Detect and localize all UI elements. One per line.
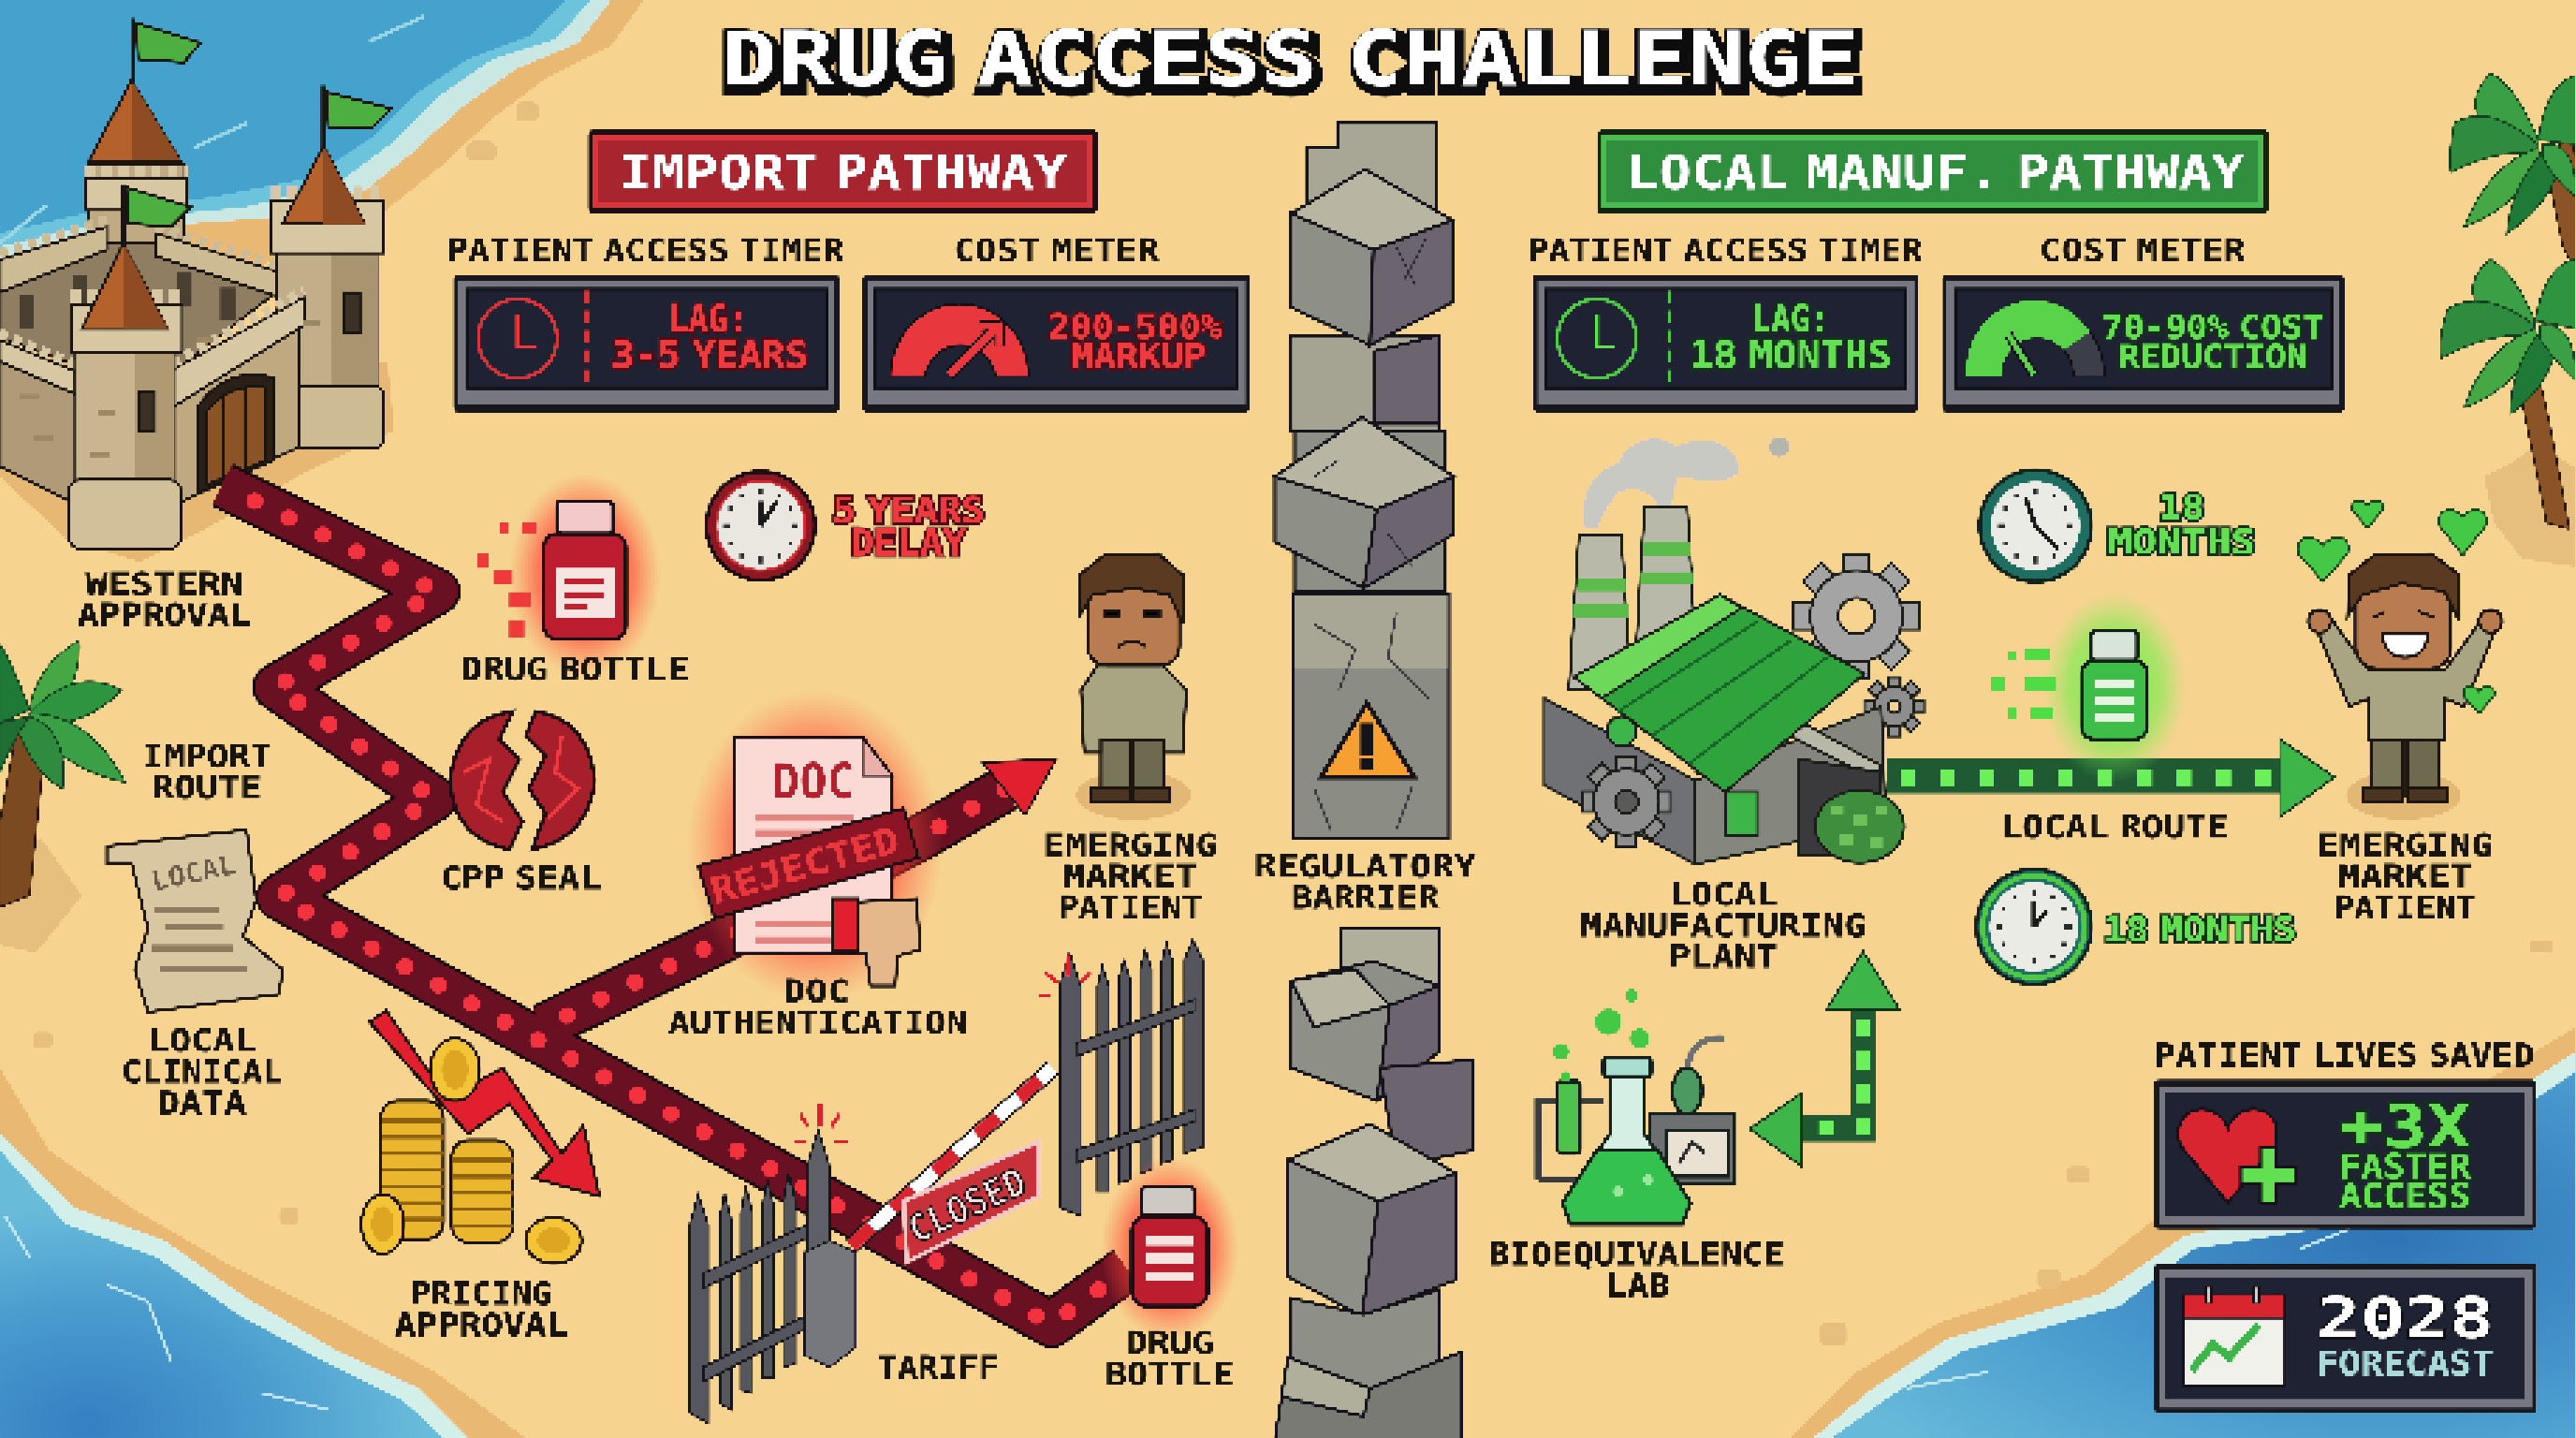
icon: green clock lower <box>1976 869 2091 984</box>
bubbles <box>1553 990 1653 1196</box>
panel: local patient timer <box>1533 274 1919 413</box>
icon: red drug bottle <box>476 473 661 677</box>
windows <box>1725 792 1758 835</box>
panel: patient lives saved: +3X <box>2339 1092 2471 1161</box>
regulatory barrier wall <box>1275 124 1473 1438</box>
right front wall <box>172 320 299 506</box>
banner: local manuf pathway: LOCAL MANUF. PATHWAY <box>1627 146 2245 201</box>
icon: green clock top <box>1980 470 2091 581</box>
label: emerging market patient (import): PATIENT <box>1058 889 1203 927</box>
label: western approval: WESTERN <box>85 565 243 603</box>
flask <box>1562 1077 1690 1225</box>
labels: local meters <box>1528 232 2246 270</box>
banner: import pathway <box>588 130 1097 213</box>
pricing approval coins and arrow <box>361 1010 600 1264</box>
castle: western approval <box>0 18 394 562</box>
palm tree: right top <box>2450 74 2576 271</box>
panel: local cost meter <box>1942 274 2345 413</box>
document rejected <box>687 690 943 1003</box>
label: patient lives saved: PATIENT LIVES SAVED <box>2155 1037 2534 1075</box>
banner: import pathway: IMPORT PATHWAY <box>619 146 1067 201</box>
label: bioequivalence lab <box>1488 1236 1784 1305</box>
happy patient <box>2308 553 2502 820</box>
label: drug bottle lower <box>1105 1325 1234 1394</box>
label: pricing approval: PRICING <box>411 1276 552 1313</box>
panel: 2028 forecast: 2028 <box>2317 1287 2494 1352</box>
roof <box>1573 594 1865 792</box>
red import route <box>222 485 1127 1325</box>
back walls <box>0 220 276 296</box>
label: doc authentication: DOC <box>783 974 849 1011</box>
text: 18 months top: MONTHS <box>2108 521 2256 562</box>
right tower <box>271 85 391 448</box>
label: pricing approval <box>394 1276 568 1344</box>
alarm sparks <box>794 956 1090 1142</box>
label: local manufacturing plant: MANUFACTURING <box>1580 907 1866 945</box>
green local route arrow <box>1888 740 2334 816</box>
stone flecks <box>20 320 320 457</box>
left gate <box>690 1173 809 1423</box>
label: bioequivalence lab: LAB <box>1606 1268 1670 1305</box>
sign: closed: CLOSED <box>901 1160 1033 1253</box>
label: local clinical data: CLINICAL <box>122 1054 283 1092</box>
green L-shaped arrow <box>1749 951 1899 1167</box>
left front wall <box>0 359 79 506</box>
barrier pole <box>851 1068 1053 1245</box>
label: local clinical data: LOCAL <box>148 1022 256 1060</box>
label: local clinical data <box>122 1022 283 1123</box>
text: 18 months top <box>2108 488 2256 562</box>
label: emerging market patient (local): PATIENT <box>2334 889 2477 927</box>
stamp: rejected: REJECTED <box>706 819 904 913</box>
label: doc authentication: AUTHENTICATION <box>668 1005 968 1042</box>
label: local manufacturing plant: PLANT <box>1669 939 1778 976</box>
panel: local cost meter: 70-90% COST <box>2102 309 2324 347</box>
panel: local patient timer: 18 MONTHS <box>1690 333 1892 377</box>
label: emerging market patient (import): EMERGING <box>1043 827 1218 864</box>
panel: patient lives saved: FASTER <box>2339 1146 2472 1186</box>
palm tree: left <box>0 640 124 907</box>
label: emerging market patient (import) <box>1043 827 1218 927</box>
barrier slab <box>1293 594 1449 838</box>
label: regulatory barrier <box>1254 848 1476 917</box>
label: import route: IMPORT <box>142 739 271 776</box>
green gear emblem <box>1606 716 1636 746</box>
labels: local meters: COST METER <box>2040 232 2246 270</box>
icon: calendar chart <box>2184 1286 2285 1387</box>
label: regulatory barrier: REGULATORY <box>1254 848 1476 886</box>
label: local route: LOCAL ROUTE <box>2000 809 2229 846</box>
icon: heart plus <box>2178 1109 2297 1203</box>
wall windows <box>20 271 235 329</box>
labels: import meters: COST METER <box>954 232 1160 270</box>
label: regulatory barrier: BARRIER <box>1292 880 1440 917</box>
label: drug bottle: DRUG BOTTLE <box>461 652 689 689</box>
label: western approval <box>77 565 252 635</box>
icon: red delay clock <box>707 472 815 580</box>
panel: import cost meter: MARKUP <box>1071 336 1206 376</box>
panel: import patient timer: 3-5 YEARS <box>611 333 809 377</box>
coin stacks <box>381 1101 444 1239</box>
castle ground shadow <box>0 353 394 562</box>
label: emerging market patient (local): EMERGING <box>2318 827 2493 864</box>
label: cpp seal: CPP SEAL <box>440 860 601 898</box>
smoke <box>1584 439 1738 529</box>
front gear <box>1582 757 1671 846</box>
lower rocks <box>1275 929 1473 1438</box>
panel: local cost meter: REDUCTION <box>2118 338 2307 376</box>
label: emerging market patient (local) <box>2318 827 2493 927</box>
gate <box>198 374 274 493</box>
label: import route <box>142 739 271 807</box>
panel: 2028 forecast: FORECAST <box>2317 1343 2494 1384</box>
bioequivalence lab <box>1538 990 1734 1225</box>
panel: import cost meter <box>862 274 1251 413</box>
courtyard <box>0 243 276 370</box>
icon: green drug bottle <box>1991 592 2187 782</box>
walls <box>1544 698 1695 864</box>
labels: import meters <box>447 232 1160 270</box>
icon: thumbs down <box>833 899 920 986</box>
right gate <box>1060 940 1203 1216</box>
label: doc authentication <box>668 974 968 1042</box>
icon: local clinical data scroll: LOCAL <box>149 849 239 899</box>
panel: patient lives saved <box>2154 1079 2537 1229</box>
upper rocks <box>1275 124 1454 592</box>
title: DRUG ACCESS CHALLENGE <box>721 16 1859 104</box>
icons: green hearts <box>2298 501 2495 713</box>
label: western approval: APPROVAL <box>77 597 252 635</box>
doorway <box>1799 759 1881 855</box>
panel: patient lives saved: ACCESS <box>2339 1176 2471 1216</box>
icon: broken CPP seal <box>450 712 594 849</box>
label: pricing approval: APPROVAL <box>394 1307 568 1344</box>
panel: import cost meter: 200-500% <box>1048 307 1222 347</box>
label: local clinical data: DATA <box>157 1085 247 1123</box>
front tower <box>69 184 191 549</box>
stamp: rejected <box>698 809 918 918</box>
text: 5 years delay: 5 YEARS <box>832 490 985 532</box>
labels: import meters: PATIENT ACCESS TIMER <box>447 232 844 270</box>
document rejected: DOC <box>772 754 855 811</box>
panel: import patient timer <box>453 274 840 413</box>
palm tree: right lower <box>2440 259 2576 529</box>
gate post <box>805 1131 856 1367</box>
label: import route: ROUTE <box>152 770 262 807</box>
panel: import patient timer: LAG: <box>668 298 748 342</box>
label: emerging market patient (import): MARKET <box>1063 858 1197 896</box>
small gear <box>1865 677 1924 736</box>
machine <box>1649 1114 1734 1183</box>
label: emerging market patient (local): MARKET <box>2338 858 2472 896</box>
chimneys <box>1569 506 1697 690</box>
water: top-left sea <box>0 0 644 312</box>
local manufacturing plant <box>1544 437 1924 864</box>
label: bioequivalence lab: BIOEQUIVALENCE <box>1488 1236 1784 1273</box>
icon: local clinical data scroll <box>107 829 283 1012</box>
panel: 2028 forecast <box>2154 1264 2537 1413</box>
icon: red drug bottle lower <box>1101 1157 1238 1341</box>
sad patient <box>1076 553 1191 820</box>
water: bottom-right sea <box>1791 1027 2576 1438</box>
label: local manufacturing plant <box>1580 876 1866 976</box>
label: drug bottle lower: DRUG <box>1125 1325 1214 1362</box>
red downward arrow <box>370 1010 600 1196</box>
text: 5 years delay: DELAY <box>851 522 967 565</box>
label: tariff: TARIFF <box>877 1350 999 1387</box>
title: DRUG ACCESS CHALLENGE <box>724 22 1862 110</box>
banner: local manuf pathway <box>1597 130 2269 213</box>
text: 5 years delay <box>832 490 985 565</box>
big gear <box>1794 553 1919 679</box>
bush <box>1815 790 1904 862</box>
back-left tower <box>85 18 200 287</box>
labels: local meters: PATIENT ACCESS TIMER <box>1528 232 1923 270</box>
text: 18 months top: 18 <box>2159 488 2204 528</box>
water: bottom-left sea <box>0 1068 526 1438</box>
test tube rack <box>1538 1101 1603 1180</box>
label: local manufacturing plant: LOCAL <box>1669 876 1778 914</box>
panel: local patient timer: LAG: <box>1751 298 1830 342</box>
icon: warning triangle <box>1321 703 1414 777</box>
text: 18 months lower: 18 MONTHS <box>2103 910 2296 950</box>
tariff gate <box>690 940 1203 1423</box>
label: drug bottle lower: BOTTLE <box>1105 1357 1234 1394</box>
